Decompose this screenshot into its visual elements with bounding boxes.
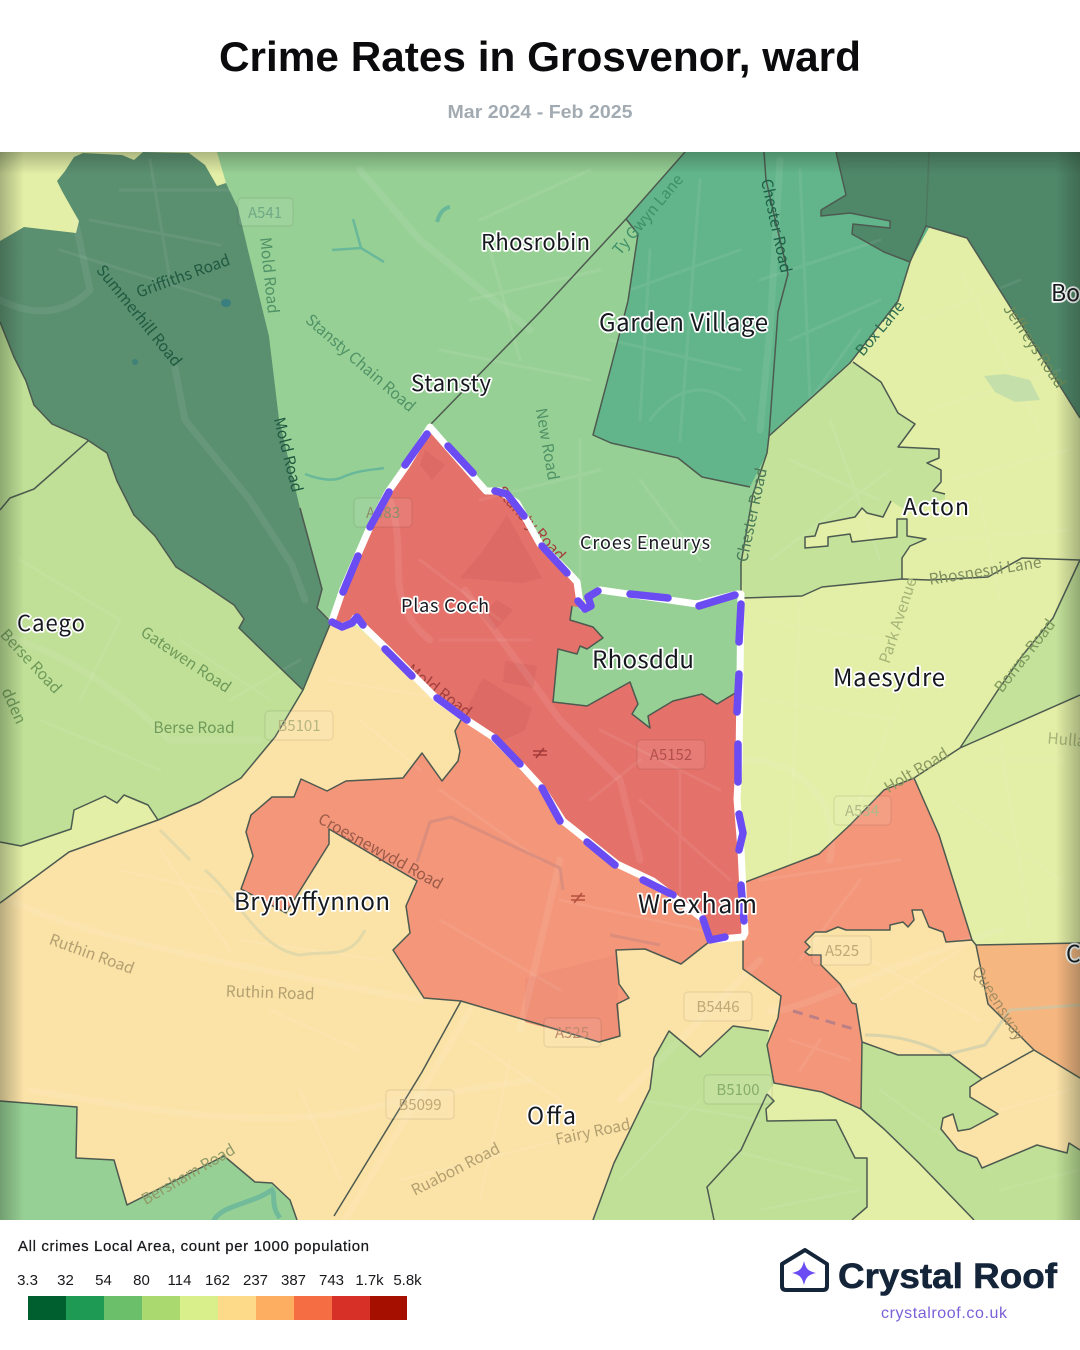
legend scale values: 743 [319,1272,344,1289]
choropleth map panel [0,152,1080,1222]
road label: Mold Road [269,415,309,494]
road label: Stansty Road [492,481,571,565]
road label: Chester Road [756,177,798,275]
road label: Chester Road [730,466,772,564]
place: Bo (clipped): Bo [1051,274,1080,308]
road label: Box Lane [850,296,909,360]
road label: Jeffreys Road [999,299,1071,392]
legend scale values [17,1272,422,1289]
area: west Wrexham orange [241,720,709,1042]
shield: A541 [238,198,293,226]
streams and ponds [132,207,1080,1055]
shield: B5446 [684,992,752,1021]
subtitle: date range: Mar 2024 - Feb 2025 [448,102,632,122]
legend title: All crimes Local Area, count per 1000 population [18,1238,369,1255]
road label: New Road [531,406,565,482]
icon: rail station Wrexham General [571,893,585,903]
shield: B5099 [386,1090,454,1119]
logo: Crystal Roof [782,1250,1057,1322]
shield: B5101 [265,711,333,740]
place: Offa: Offa [527,1097,576,1131]
road label: Gatewen Road [137,621,236,697]
faint road network [0,156,1062,1120]
place: Rhosddu: Rhosddu [592,640,694,675]
legend scale values: 80 [133,1272,150,1289]
shield: A534 [834,796,891,825]
shield: A5152: A5152 [650,744,692,765]
area: Caego [0,322,303,846]
road label: Holt Road [880,742,952,798]
legend scale values: 114 [168,1272,191,1289]
area: south-east green [861,1042,1080,1220]
legend scale values: 1.7k [355,1272,384,1289]
shield: B5101: B5101 [277,715,321,736]
area: Rhosddu [553,590,741,728]
patch: dotted darker block [525,1004,620,1036]
boundary lines [0,152,1080,1220]
area: Borras green [960,562,1080,748]
website: crystalroof.co.uk [881,1305,1008,1322]
river south-west [213,1190,280,1222]
shield: A5152 [637,740,705,769]
road label: Griffiths Road [133,248,233,303]
legend [17,1238,422,1320]
map base area [0,152,1080,1220]
road label: Stansty Chain Road [301,309,421,416]
road label: Mold Road [255,236,285,315]
area: Stansty and Croes Eneurys [217,152,765,618]
place: Brynyffynnon: Brynyffynnon [234,882,390,917]
area: south-east peach [941,1050,1080,1168]
shield: B5100 [704,1075,772,1104]
area: south green [707,1094,867,1220]
legend scale values: 5.8k [393,1272,422,1289]
area: east Wrexham orange [743,778,972,1109]
icon: rail station in ward [533,748,547,758]
legend scale values: 32 [57,1272,74,1289]
road label: Croesnewydd Road [315,807,447,894]
title: Crime Rates in Grosvenor, ward [219,33,861,80]
road label: Ruthin Road [47,928,138,979]
legend scale values: 3.3 [17,1272,38,1289]
legend scale values: 162 [205,1272,230,1289]
shield: A525 east: A525 [825,940,859,961]
road label: Berse Road [153,716,235,738]
place: Garden Village: Garden Village [599,303,768,338]
road labels [0,169,1080,1210]
legend scale values: 54 [95,1272,112,1289]
place: Acton: Acton [903,488,969,522]
legend scale values: 387 [281,1272,306,1289]
icon: house with star [782,1250,827,1290]
area: Grosvenor ward [332,427,745,940]
road label: Fairy Road [553,1112,632,1150]
legend scale values: 237 [243,1272,268,1289]
place: Croes Eneurys: Croes Eneurys [580,529,710,555]
patches: darker blocks in ward [420,450,542,742]
road shields [238,198,891,1119]
shield: B5100: B5100 [716,1079,760,1100]
wordmark: Crystal Roof [838,1257,1057,1296]
place labels [17,225,1080,1131]
area: Brynyffynnon and Offa [0,622,781,1220]
shield: A525 south [544,1018,601,1047]
shield: A525 east [812,936,871,965]
road label: Summerhill Road [92,260,188,371]
road label: Queensway [968,961,1031,1044]
road label: Ruabon Road [407,1137,503,1200]
shield: A525 south: A525 [555,1022,589,1043]
road label: Mold Road [402,658,477,722]
area: Garden Village [593,152,930,487]
place: Plas Coch: Plas Coch [401,592,489,618]
area: Queensway orange [976,943,1080,1077]
place: Maesydre: Maesydre [833,658,945,693]
area: north-east dark green [821,152,1080,418]
ward boundary outline [332,427,745,940]
area: A525 peach [805,910,1034,1079]
road label: Ty Gwyn Lane [607,169,688,259]
legend colour bar [28,1296,407,1320]
road label: Rhosnesni Lane [927,550,1043,590]
map edge vignette [0,152,1080,1220]
shield: B5099: B5099 [398,1094,442,1115]
road label: Park Avenue [873,574,922,666]
road label: Ruthin Road [225,979,315,1005]
area: Acton lower green [741,362,945,598]
place: Caego: Caego [17,606,85,638]
shield: B5446: B5446 [696,996,740,1017]
area: south-west green [0,1101,297,1220]
road label: Borras Road [989,614,1060,697]
shield: A483 [354,498,412,527]
place: Stansty: Stansty [411,366,492,398]
shield: A483: A483 [366,502,400,523]
place: Wrexham: Wrexham [638,885,757,921]
place: Rhosrobin: Rhosrobin [481,225,590,257]
shield: A534: A534 [845,800,879,821]
area: B5100 green [593,1026,774,1220]
purple dashes on ward outline [332,434,744,940]
road label: Bersham Road [137,1138,239,1210]
area: Summerhill dark green [0,152,331,690]
shield: A541: A541 [248,202,282,223]
